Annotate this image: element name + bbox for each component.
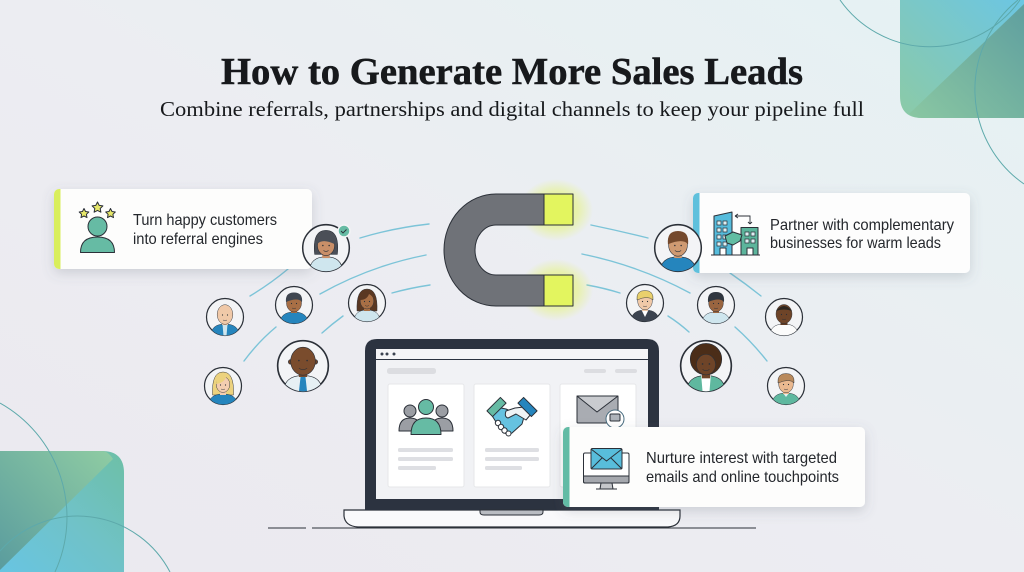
callout text: Nurture interest with targeted bbox=[646, 450, 837, 467]
avatar: man in blue polo bbox=[655, 225, 701, 272]
avatar: man with tie bbox=[278, 341, 328, 392]
title: How to Generate More Sales Leads bbox=[221, 51, 803, 93]
callout text: into referral engines bbox=[133, 231, 263, 248]
avatar: blonde woman bbox=[204, 368, 242, 405]
callout: digital nurture bbox=[563, 427, 865, 507]
corner decoration: bottom left bbox=[0, 403, 170, 572]
ground line bbox=[268, 527, 756, 529]
screen card: people bbox=[388, 384, 464, 487]
connector lines: right bbox=[582, 225, 767, 361]
avatar: bald man in white tee bbox=[766, 298, 802, 336]
callout text: businesses for warm leads bbox=[770, 235, 941, 252]
icon: envelope with monitor badge bbox=[577, 396, 624, 428]
icon: magnet bbox=[444, 179, 593, 321]
laptop screen bbox=[376, 349, 648, 499]
callout text: Partner with complementary bbox=[770, 217, 954, 234]
laptop hinge notch bbox=[480, 510, 543, 515]
avatar: bald man bbox=[206, 298, 244, 336]
avatar: woman with check badge bbox=[303, 225, 349, 272]
laptop bbox=[268, 339, 756, 528]
icon: monitor with envelope bbox=[584, 448, 629, 489]
laptop base bbox=[344, 510, 680, 527]
avatar: man in light tee bbox=[698, 286, 734, 324]
browser bar bbox=[376, 349, 648, 374]
callout: partnerships bbox=[693, 193, 970, 273]
avatar: blond man in suit bbox=[626, 284, 664, 322]
icon: handshake bbox=[487, 397, 537, 436]
callout: referrals bbox=[54, 189, 312, 269]
icon: group of people bbox=[399, 400, 453, 434]
callout text: emails and online touchpoints bbox=[646, 469, 839, 486]
avatar: man in green polo bbox=[768, 368, 804, 405]
icon: customer with stars bbox=[79, 202, 115, 252]
laptop screen frame bbox=[365, 339, 659, 510]
icon: partner buildings bbox=[711, 212, 760, 255]
connector lines: left bbox=[244, 224, 430, 361]
screen card: handshake bbox=[474, 384, 550, 487]
corner decoration: top right bbox=[840, 0, 1024, 184]
screen card: email bbox=[560, 384, 636, 487]
callout text: Turn happy customers bbox=[133, 212, 277, 229]
icon: check badge bbox=[338, 225, 350, 237]
avatar: woman with afro bbox=[681, 341, 731, 392]
avatar: woman with long hair bbox=[348, 284, 386, 322]
avatar: man in blue shirt bbox=[276, 286, 312, 324]
subtitle: Combine referrals, partnerships and digital channels to keep your pipeline full bbox=[160, 97, 864, 121]
